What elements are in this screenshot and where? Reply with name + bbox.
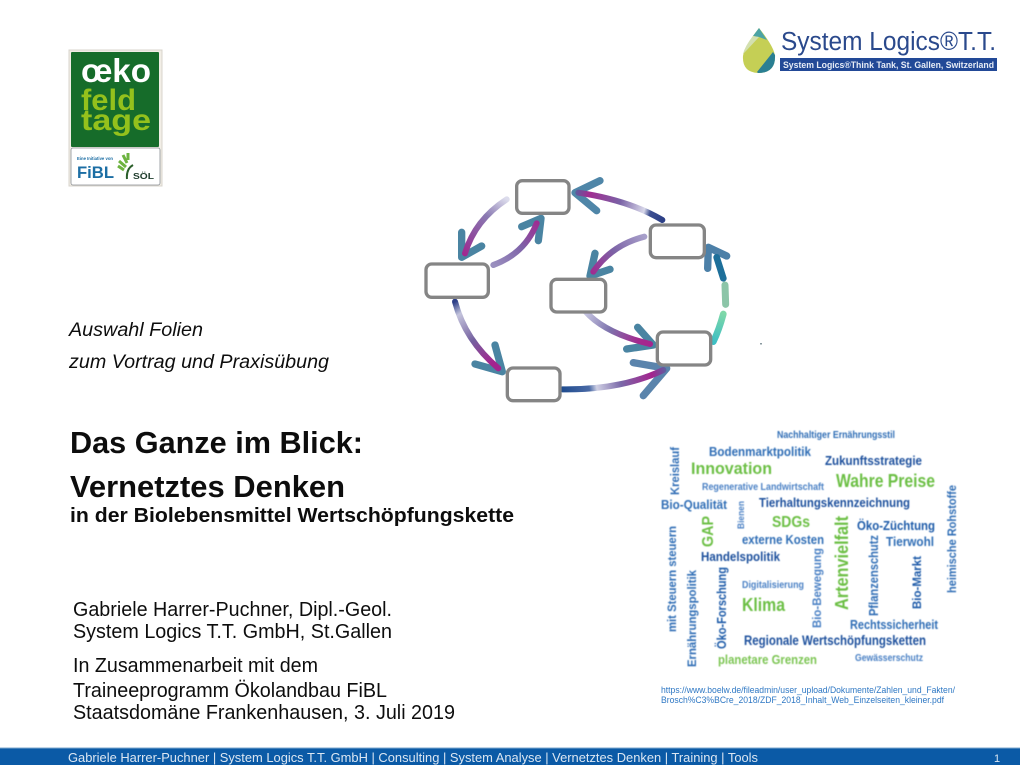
word cloud: Nachhaltiger Ernährungsstil bbox=[777, 430, 895, 441]
logo: oekofeldtage: œko bbox=[81, 52, 151, 89]
logo: oekofeldtage: feld bbox=[81, 84, 136, 117]
author block: System Logics T.T. GmbH, St.Gallen bbox=[73, 621, 392, 643]
word cloud: Regionale Wertschöpfungsketten bbox=[744, 633, 926, 648]
author block bbox=[73, 599, 455, 724]
word cloud: Regenerative Landwirtschaft bbox=[702, 481, 824, 493]
word cloud bbox=[661, 430, 959, 667]
word cloud: planetare Grenzen bbox=[718, 653, 817, 667]
word cloud: Öko-Forschung bbox=[714, 567, 729, 649]
word cloud: Artenvielfalt bbox=[832, 516, 852, 610]
author block: Traineeprogramm Ökolandbau FiBL bbox=[73, 680, 387, 702]
boxes bbox=[426, 181, 711, 401]
arrow: box B to box C bbox=[590, 237, 644, 276]
word cloud: Zukunftsstrategie bbox=[825, 454, 922, 468]
word cloud: Bio-Markt bbox=[910, 556, 924, 609]
source link: Brosch%C3%BCre_2018/ZDF_2018_Inhalt_Web_Einzelseiten_kleiner.pdf bbox=[661, 695, 944, 705]
word cloud: Pflanzenschutz bbox=[867, 535, 881, 616]
word cloud: Tierwohl bbox=[886, 535, 934, 549]
logo: oekofeldtage: Eine Initiative von bbox=[77, 156, 113, 162]
source link bbox=[661, 685, 955, 705]
subtitle: selection note bbox=[68, 319, 329, 373]
logo: System Logics T.T.: System Logics®T.T. bbox=[781, 28, 996, 56]
word cloud: SDGs bbox=[772, 514, 810, 531]
word cloud: Digitalisierung bbox=[742, 579, 804, 591]
logo: oekofeldtage: tage bbox=[81, 104, 151, 137]
author block: In Zusammenarbeit mit dem bbox=[73, 655, 318, 677]
main title: Vernetztes Denken bbox=[70, 470, 345, 504]
footer bar bbox=[0, 748, 1020, 765]
source link: https://www.boelw.de/fileadmin/user_upload/Dokumente/Zahlen_und_Fakten/ bbox=[661, 685, 955, 695]
word cloud: Öko-Züchtung bbox=[857, 518, 935, 533]
arrow: top box B to box A bbox=[575, 181, 662, 220]
word cloud: Kreislauf bbox=[668, 446, 682, 495]
word cloud: Bienen bbox=[736, 501, 746, 529]
logo: System Logics T.T.: System Logics®Think Tank, St. Gallen, Switzerland bbox=[783, 60, 994, 70]
word cloud: mit Steuern steuern bbox=[665, 526, 679, 632]
author block: Gabriele Harrer-Puchner, Dipl.-Geol. bbox=[73, 599, 392, 621]
arrow: box D to box A bbox=[493, 218, 541, 265]
diagram: network of arrows and boxes bbox=[426, 181, 727, 401]
main title bbox=[70, 426, 363, 504]
word cloud: GAP bbox=[700, 516, 717, 547]
arrow: box D to box F bbox=[455, 302, 502, 372]
word cloud: Wahre Preise bbox=[836, 471, 935, 491]
footer bar: 1 bbox=[994, 753, 1000, 765]
word cloud: Bodenmarktpolitik bbox=[709, 444, 812, 459]
logo: oekofeldtage: SÖL bbox=[133, 171, 154, 181]
subtitle: selection note: Auswahl Folien bbox=[68, 319, 203, 341]
word cloud: Ernährungspolitik bbox=[685, 570, 699, 667]
word cloud: Rechtssicherheit bbox=[850, 618, 939, 632]
subtitle: in der Biolebensmittel Wertschöpfungskette bbox=[70, 505, 514, 527]
word cloud: Innovation bbox=[691, 459, 772, 478]
logo: System Logics T.T. bbox=[743, 28, 997, 73]
footer bar: Gabriele Harrer-Puchner | System Logics T.T. GmbH | Consulting | System Analyse | Vernetztes Denken | Training | Tools bbox=[68, 751, 758, 765]
arrow: box F to box E bbox=[562, 363, 667, 396]
word cloud: Handelspolitik bbox=[701, 550, 780, 564]
arrow: box A to box D bbox=[462, 199, 507, 257]
arrow: box C to box E bbox=[586, 312, 653, 349]
logo: oekofeldtage bbox=[69, 50, 162, 186]
author block: Staatsdomäne Frankenhausen, 3. Juli 2019 bbox=[73, 702, 455, 724]
main title: Das Ganze im Blick: bbox=[70, 426, 363, 460]
arrow: box E to box B, dashed bbox=[708, 247, 727, 342]
subtitle: selection note: zum Vortrag und Praxisübung bbox=[68, 351, 329, 373]
word cloud: Bio-Qualität bbox=[661, 498, 728, 512]
word cloud: Tierhaltungskennzeichnung bbox=[759, 496, 910, 510]
word cloud: Bio-Bewegung bbox=[810, 548, 824, 628]
word cloud: Klima bbox=[742, 595, 786, 615]
logo: oekofeldtage: FiBL bbox=[77, 164, 114, 182]
word cloud: Gewässerschutz bbox=[855, 652, 923, 664]
word cloud: heimische Rohstoffe bbox=[945, 485, 959, 593]
word cloud: externe Kosten bbox=[742, 533, 824, 547]
